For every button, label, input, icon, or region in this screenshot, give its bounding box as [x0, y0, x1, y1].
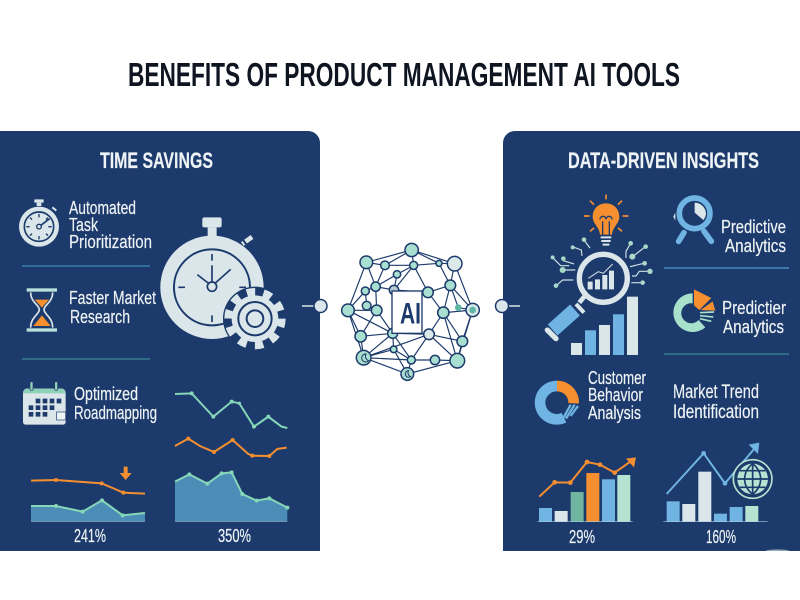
text: market trend identification: Market Trend [673, 382, 759, 403]
heading: time savings: TIME SAVINGS [100, 148, 213, 173]
text: predictier analytics [722, 298, 786, 337]
icon: large stopwatch with gear [160, 217, 287, 351]
panel: data-driven insights [503, 131, 800, 551]
value: 241%: 241% [74, 526, 106, 546]
text: optimized roadmapping: Optimized [74, 384, 138, 404]
chart: small line and area chart [31, 467, 145, 521]
panel: time savings [0, 131, 320, 551]
icon: donut chart [540, 386, 578, 419]
text: market trend identification [673, 382, 759, 423]
value: 29%: 29% [569, 527, 595, 547]
connector: left panel to AI [302, 300, 327, 312]
text: faster market research: Research [70, 307, 130, 327]
icon: AI neural network [342, 243, 479, 380]
chart: customer bars with orange trend [537, 457, 636, 522]
icon: stopwatch [19, 199, 59, 247]
icon: hourglass [27, 288, 57, 332]
value: 350%: 350% [218, 526, 251, 546]
text: optimized roadmapping [74, 384, 157, 423]
text: predictive analytics: Analytics [725, 236, 786, 256]
text: predictier analytics: Predictier [722, 298, 786, 318]
chart: large line and area chart [175, 391, 289, 521]
text: customer behavior analysis: Behavior [588, 385, 643, 405]
chart: rising bars [571, 297, 638, 355]
text: automated task prioritization: Task [69, 215, 99, 235]
icon: pie chart [673, 289, 715, 332]
text: AI: AI [400, 297, 421, 330]
text: customer behavior analysis: Customer [588, 368, 646, 388]
text: automated task prioritization: Automated [69, 198, 136, 218]
value: 160%: 160% [706, 527, 736, 547]
icon: globe [733, 460, 772, 498]
text: predictive analytics [721, 217, 786, 256]
icon: predictive magnifier [673, 198, 711, 241]
icon: calendar [23, 382, 66, 425]
text: predictive analytics: Predictive [721, 217, 786, 237]
text: customer behavior analysis [588, 368, 646, 423]
arrow: down [120, 467, 132, 480]
text: faster market research: Faster Market [69, 288, 156, 308]
connector: right panel to AI [496, 300, 520, 312]
icon: light bulb [584, 195, 628, 245]
text: faster market research [69, 288, 156, 327]
text: optimized roadmapping: Roadmapping [74, 403, 157, 423]
text: predictier analytics: Analytics [723, 317, 784, 337]
text: market trend identification: Identification [673, 402, 759, 423]
icon: magnifying glass with chart [547, 237, 653, 339]
text: automated task prioritization: Prioritization [69, 232, 152, 252]
chart: market bars with blue trend and globe [663, 443, 772, 522]
text: automated task prioritization [69, 198, 152, 252]
text: customer behavior analysis: Analysis [588, 403, 641, 423]
